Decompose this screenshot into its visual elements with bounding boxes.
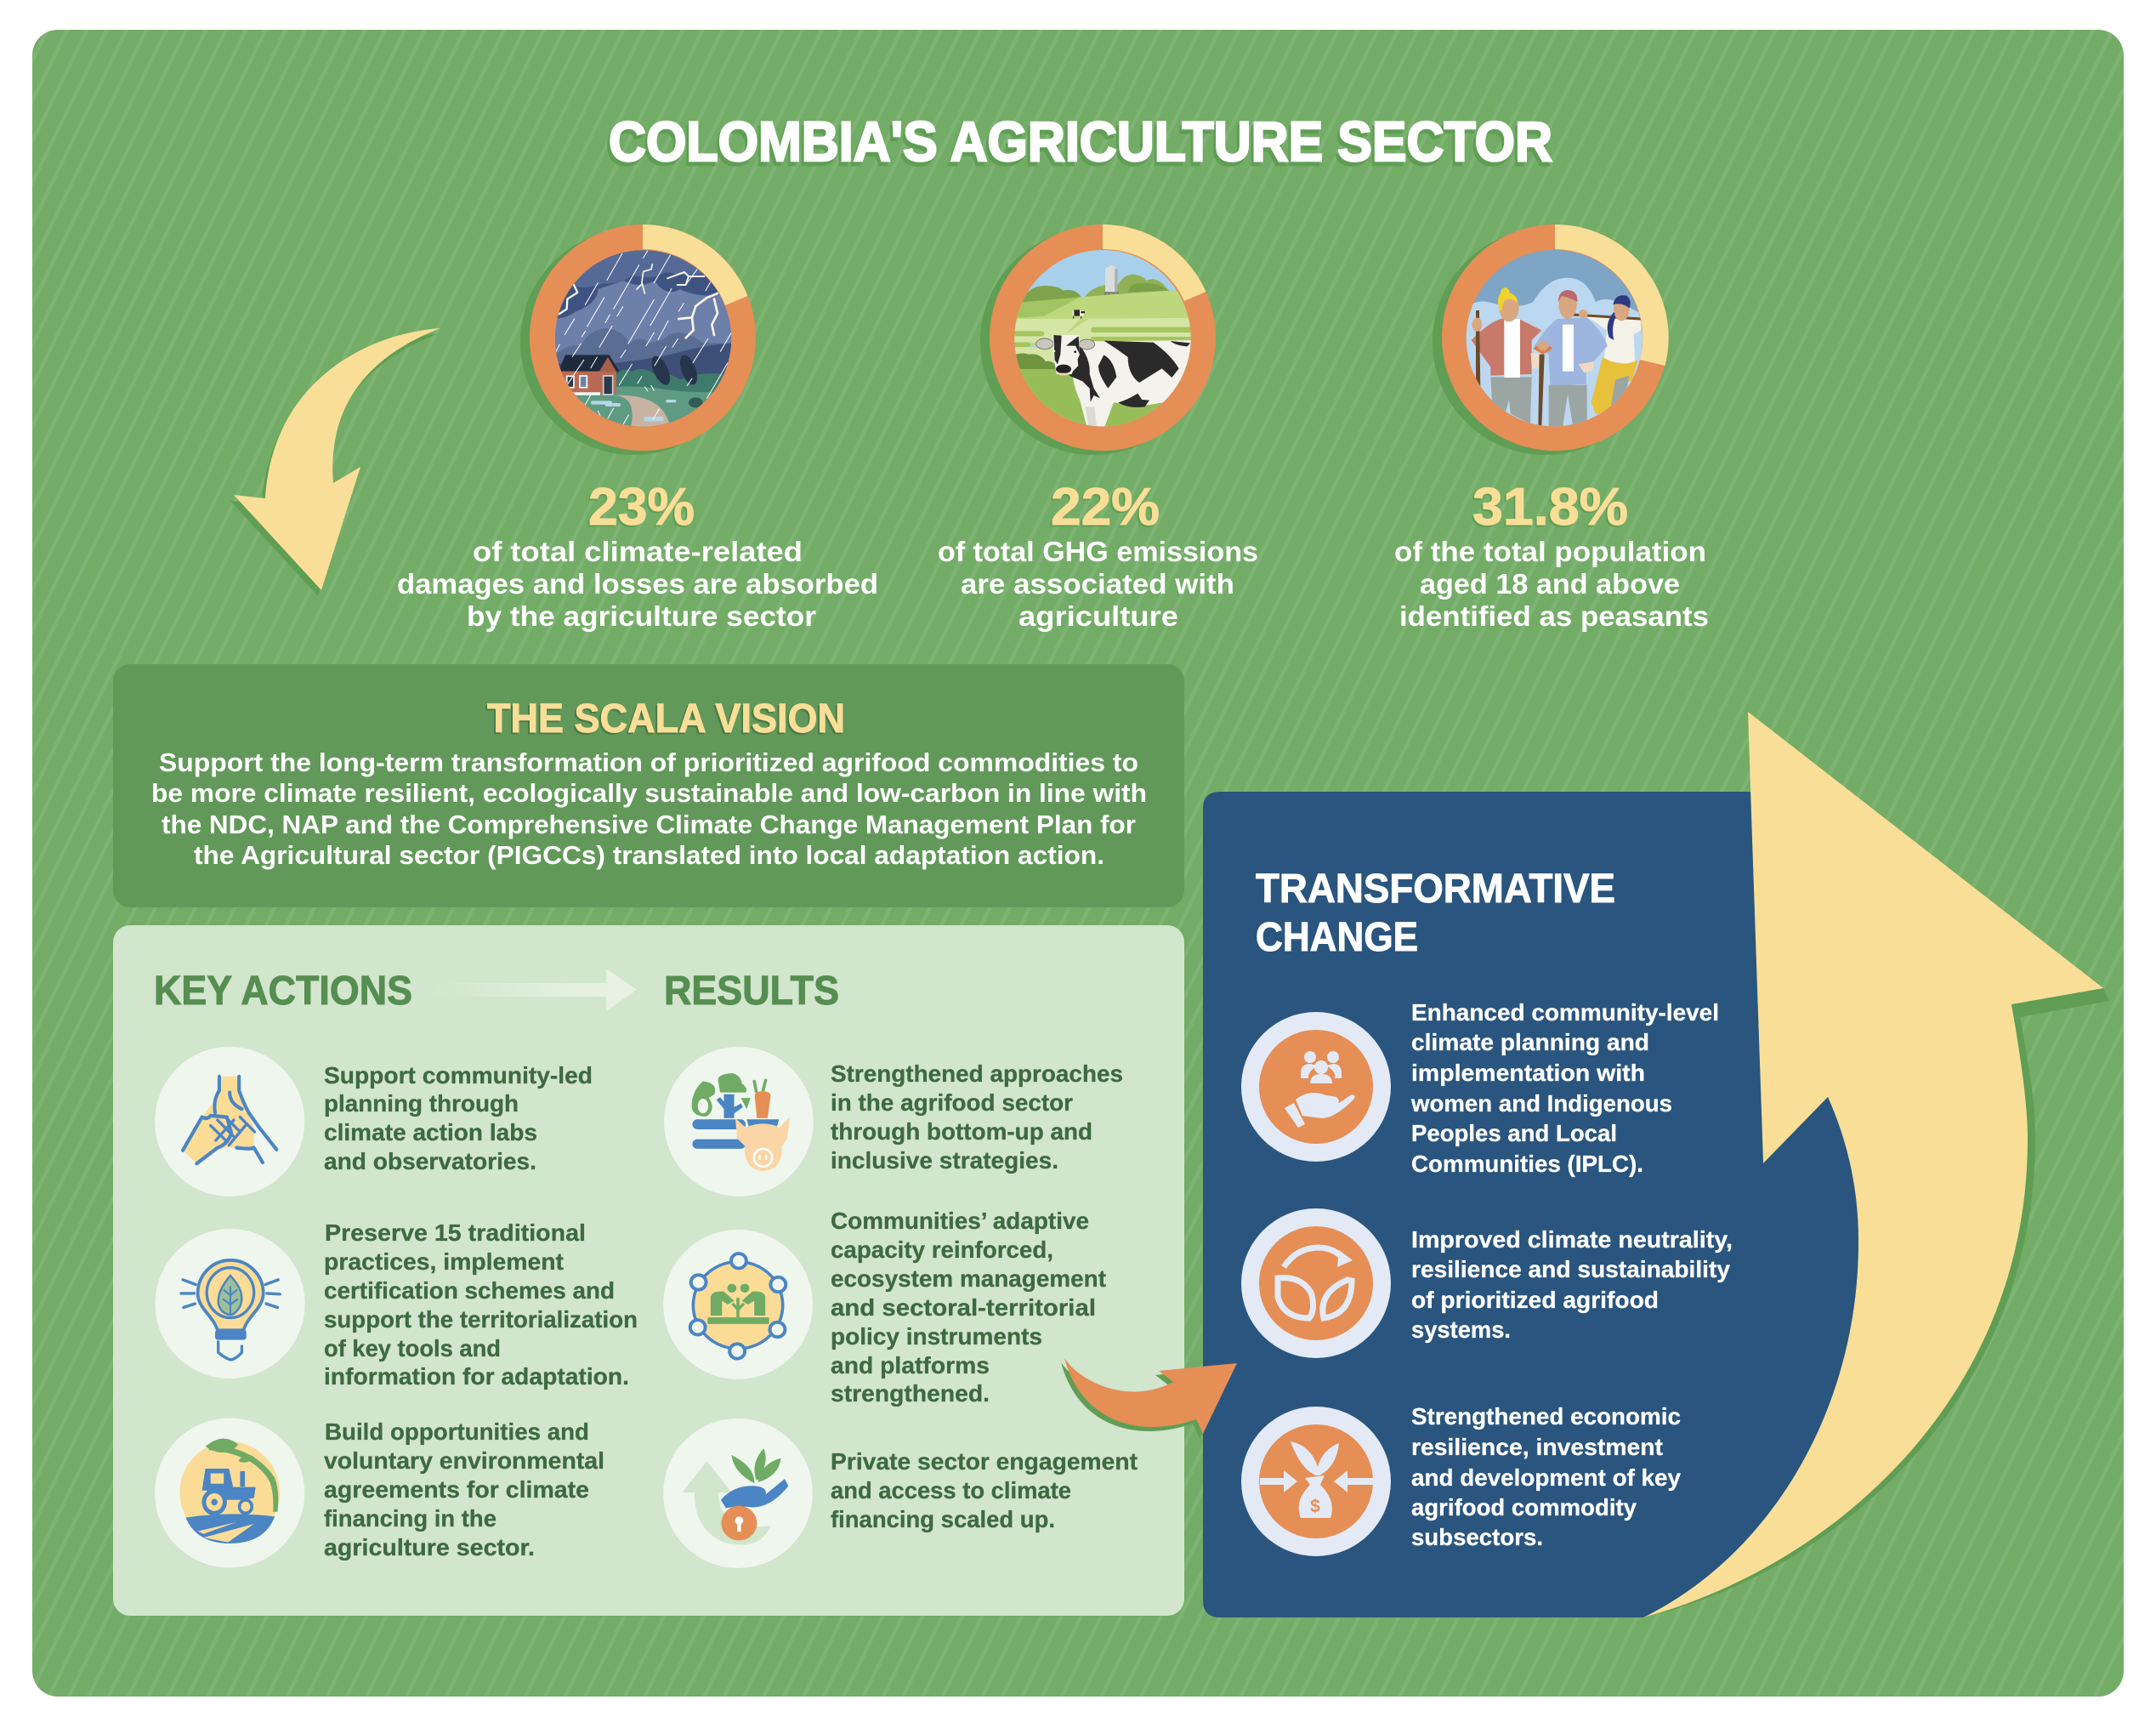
text: result 2: strengthened.	[831, 1380, 990, 1407]
text: action 3: Build opportunities and	[325, 1418, 589, 1445]
text: result 2: ecosystem management	[831, 1265, 1106, 1292]
panel: key actions and results	[113, 925, 1184, 1616]
stat 1 text: by the agriculture sector	[467, 600, 816, 632]
text: action 2	[324, 1219, 638, 1390]
text: action 3	[324, 1418, 604, 1560]
text: action 3: financing in the	[324, 1505, 496, 1532]
icon: sustainability cycle	[1241, 1208, 1391, 1358]
text: change 1: implementation with	[1411, 1060, 1645, 1086]
stat 1 text	[397, 478, 878, 632]
icon: community network	[663, 1230, 813, 1379]
stat donut: dairy farm scene 22%	[980, 225, 1216, 455]
stat 1 text: 23%	[588, 478, 695, 537]
heading: the SCALA vision: THE SCALA VISION	[487, 696, 845, 742]
text: result 3: Private sector engagement	[831, 1448, 1138, 1475]
text: action 2: Preserve 15 traditional	[325, 1219, 586, 1246]
text: action 2: support the territorialization	[324, 1306, 638, 1333]
text: result 3: and access to climate	[831, 1477, 1071, 1503]
text: result 1	[831, 1060, 1123, 1174]
text: action 2: certification schemes and	[324, 1277, 615, 1304]
text: action 2: of key tools and	[324, 1335, 501, 1361]
text: result 1: through bottom-up and	[831, 1118, 1092, 1145]
stat 3 text	[1394, 478, 1709, 632]
text: change 2: resilience and sustainability	[1411, 1256, 1731, 1282]
text: result 2: and sectoral-territorial	[831, 1294, 1096, 1321]
text: change 1: Enhanced community-level	[1411, 999, 1719, 1026]
stat 2 text: 22%	[1051, 478, 1160, 537]
text: result 1: Strengthened approaches	[831, 1060, 1123, 1087]
text: action 1: climate action labs	[324, 1119, 537, 1145]
stat 1 text: damages and losses are absorbed	[397, 568, 878, 600]
text: change 2: Improved climate neutrality,	[1411, 1226, 1733, 1253]
heading: transformative change: CHANGE	[1256, 915, 1418, 960]
text: change 1: women and Indigenous	[1410, 1090, 1672, 1117]
icon: investment bag: $	[1310, 1497, 1320, 1516]
text: result 2: policy instruments	[831, 1323, 1042, 1350]
text: change 3	[1411, 1403, 1682, 1550]
icon: climate finance	[663, 1418, 813, 1568]
stat 2 text: are associated with	[961, 568, 1234, 600]
man with yellow hair	[1490, 377, 1532, 423]
heading: transformative change	[1256, 867, 1615, 960]
text: result 3: financing scaled up.	[831, 1506, 1055, 1532]
panel: the SCALA vision	[113, 664, 1184, 907]
text: action 1: planning through	[324, 1090, 519, 1117]
text: action 3: voluntary environmental	[324, 1447, 604, 1474]
text: action 1: Support community-led	[324, 1062, 593, 1089]
stat 3 text: of the total population	[1394, 536, 1706, 567]
text: change 2	[1411, 1226, 1733, 1343]
arrow: large yellow upward arrow	[1643, 712, 2109, 1617]
stat donut: peasants scene 31.8%	[1433, 225, 1669, 455]
text: result 1: in the agrifood sector	[831, 1089, 1073, 1116]
text: action 2: practices, implement	[324, 1248, 564, 1275]
text: result 1: inclusive strategies.	[831, 1147, 1058, 1174]
arrow: key actions to results	[434, 969, 637, 1011]
text: change 1: climate planning and	[1411, 1029, 1649, 1055]
heading: results: RESULTS	[664, 969, 839, 1014]
text: action 3: agreements for climate	[324, 1476, 589, 1503]
icon: hand holding community	[1241, 1012, 1391, 1162]
text: result 2: Communities’ adaptive	[831, 1208, 1089, 1234]
arrow: curved yellow arrow pointing down to the vision panel	[230, 328, 440, 596]
text: change 3: Strengthened economic	[1411, 1403, 1681, 1430]
stat 3 text: 31.8%	[1472, 478, 1628, 537]
stat 2 text	[938, 478, 1258, 632]
text: result 2	[831, 1208, 1106, 1407]
stat 2 text: agriculture	[1018, 600, 1178, 632]
icon: agrifood commodities	[664, 1047, 814, 1197]
text: action 3: agriculture sector.	[324, 1534, 535, 1560]
vision body text	[151, 747, 1147, 870]
text: change 3: agrifood commodity	[1411, 1494, 1637, 1521]
text: change 3: subsectors.	[1411, 1524, 1543, 1550]
icon: joined hands	[155, 1047, 304, 1197]
woman	[1586, 316, 1641, 364]
heading: transformative change: TRANSFORMATIVE	[1256, 867, 1615, 912]
vision body text: the Agricultural sector (PIGCCs) translated into local adaptation action.	[194, 840, 1104, 870]
text: result 2: capacity reinforced,	[831, 1236, 1053, 1263]
text: change 1: Peoples and Local	[1411, 1120, 1617, 1146]
stat donut: storm scene 23%	[520, 225, 756, 455]
panel: transformative change	[1203, 792, 1858, 1617]
icon: tractor in field	[155, 1418, 304, 1568]
title: COLOMBIA'S AGRICULTURE SECTOR	[609, 110, 1552, 173]
text: change 3: and development of key	[1411, 1464, 1682, 1491]
stat 1 text: of total climate-related	[473, 536, 803, 567]
text: change 3: resilience, investment	[1411, 1434, 1663, 1460]
text: action 1: and observatories.	[324, 1148, 536, 1174]
stat 3 text: aged 18 and above	[1420, 568, 1680, 600]
stat 3 text: identified as peasants	[1399, 600, 1709, 632]
text: action 2: information for adaptation.	[324, 1363, 629, 1390]
icon: light bulb with leaf	[155, 1229, 305, 1378]
stat 2 text: of total GHG emissions	[938, 536, 1258, 567]
text: change 1: Communities (IPLC).	[1411, 1151, 1643, 1177]
arrow: orange arrow from results to transformative change	[1061, 1358, 1237, 1438]
icon: investment bag	[1241, 1407, 1391, 1556]
text: change 2: systems.	[1411, 1316, 1511, 1343]
text: change 2: of prioritized agrifood	[1411, 1287, 1659, 1313]
vision body text: the NDC, NAP and the Comprehensive Climate Change Management Plan for	[162, 810, 1136, 839]
text: action 1	[324, 1062, 593, 1174]
vision body text: Support the long-term transformation of prioritized agrifood commodities to	[159, 747, 1138, 777]
text: result 2: and platforms	[831, 1352, 990, 1378]
text: result 3	[831, 1448, 1138, 1532]
man centre	[1549, 385, 1587, 427]
vision body text: be more climate resilient, ecologically sustainable and low-carbon in line with	[151, 778, 1147, 808]
heading: key actions: KEY ACTIONS	[154, 969, 412, 1014]
text: change 1	[1410, 999, 1719, 1177]
